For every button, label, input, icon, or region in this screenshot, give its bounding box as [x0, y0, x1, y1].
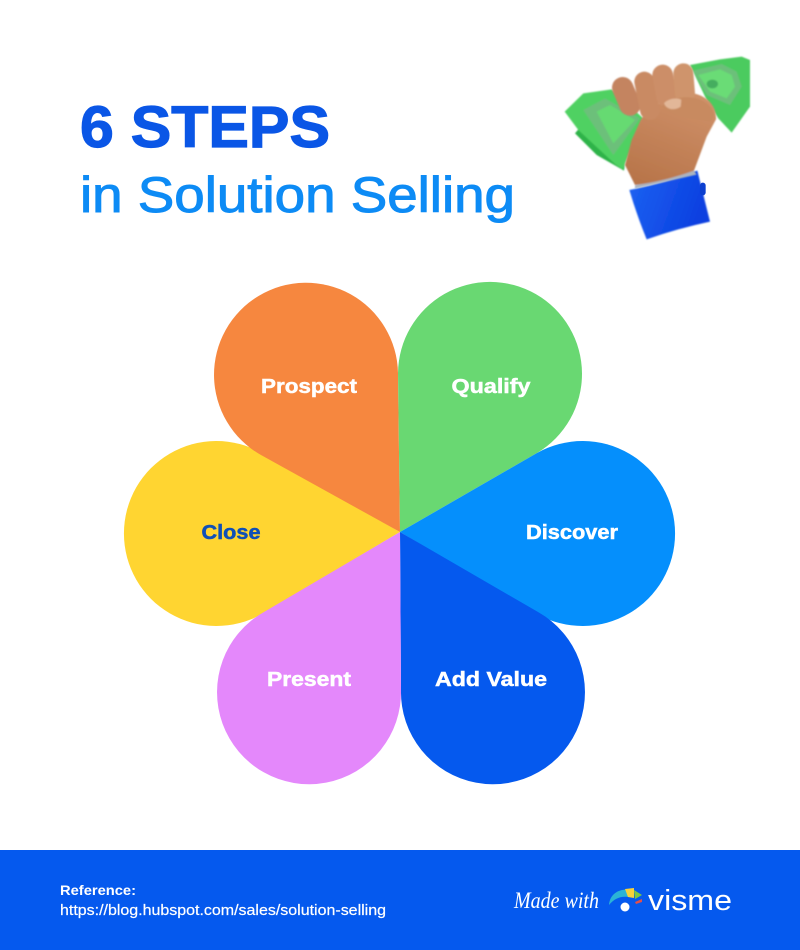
- made with visme logo: visme: [648, 885, 732, 917]
- petal: Prospect: [214, 283, 400, 532]
- label: Add Value: Add Value: [435, 669, 547, 691]
- icon: hand gripping money: [565, 57, 750, 239]
- subtitle: in Solution Selling: in Solution Selling: [80, 167, 515, 223]
- petal: Present: [217, 532, 401, 784]
- petal: Qualify: [398, 282, 582, 532]
- footer reference text: [60, 882, 386, 919]
- flower diagram: [124, 282, 675, 784]
- cuff: [629, 171, 710, 239]
- petal: Add Value: [400, 532, 585, 784]
- left banknotes: [565, 89, 643, 171]
- footer reference text: https://blog.hubspot.com/sales/solution-selling: [60, 903, 386, 919]
- made with visme logo: Made with: [513, 888, 599, 913]
- petal: Discover: [400, 441, 675, 626]
- made with visme logo: [513, 885, 732, 917]
- label: Discover: Discover: [526, 522, 618, 544]
- icon: visme logo: [609, 888, 642, 912]
- footer bar: [0, 850, 800, 950]
- label: Close: Close: [202, 522, 260, 544]
- petal: Close: [124, 441, 400, 626]
- label: Qualify: Qualify: [452, 376, 532, 398]
- right banknotes: [690, 57, 750, 133]
- cuff button: [700, 183, 706, 195]
- footer reference text: Reference:: [60, 882, 136, 898]
- label: Present: Present: [267, 669, 351, 691]
- label: Prospect: Prospect: [261, 376, 357, 398]
- hand: [623, 73, 716, 189]
- title: 6 STEPS: 6 STEPS: [80, 95, 330, 160]
